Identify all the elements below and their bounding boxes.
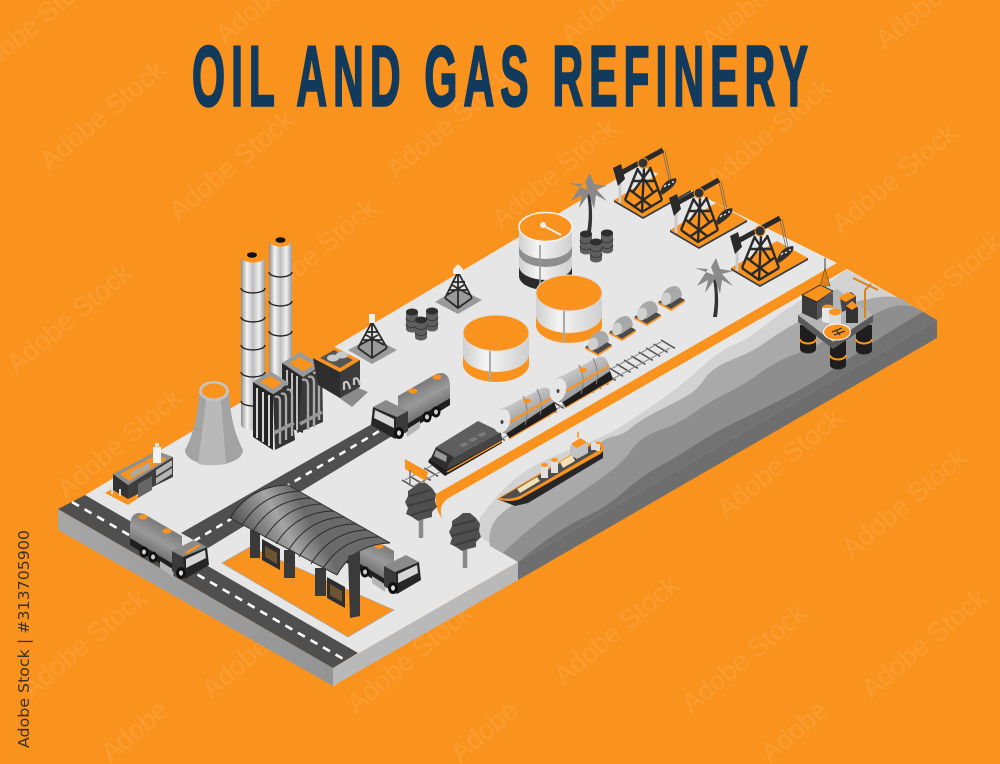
gas station forecourt: [222, 547, 394, 637]
watermark: Adobe Stock: [163, 104, 300, 226]
watermark: Adobe Stock: [486, 112, 623, 234]
chimney stacks: [241, 236, 292, 430]
watermark: Adobe Stock: [566, 222, 703, 344]
stock credit: Adobe Stock | #313705900: [15, 530, 33, 748]
title: OIL AND GAS REFINERY: [192, 30, 808, 124]
cooling tower: [185, 381, 243, 465]
sea with wave layers: [478, 270, 937, 562]
orange strip along the shore: [436, 263, 847, 518]
side road: [181, 424, 392, 548]
storage tank middle: [536, 275, 602, 343]
storage tank tall: [519, 212, 572, 290]
main road: [58, 495, 358, 668]
watermark: Adobe Stock: [856, 582, 993, 704]
palm tree 1: [569, 173, 607, 232]
watermark: Adobe Stock: [16, 582, 153, 704]
watermark: Adobe Stock: [34, 54, 171, 176]
cylinder skids: [585, 286, 685, 356]
watermark: Adobe Stock: [341, 597, 478, 719]
watermark: Adobe Stock: [548, 569, 685, 691]
parked tanker truck: [342, 528, 421, 594]
orange sign: [405, 459, 428, 492]
locomotive: [428, 421, 502, 476]
pipe building rear: [282, 352, 323, 433]
offshore oil rig: [798, 258, 878, 370]
pumpjacks: [613, 150, 808, 287]
watermark: Adobe Stock: [711, 402, 848, 524]
watermark: Adobe Stock: [676, 597, 813, 719]
railway track: [402, 340, 675, 488]
watermark: Adobe Stock: [381, 62, 518, 184]
watermark: Adobe Stock: [51, 382, 188, 504]
palm tree 2: [695, 258, 733, 317]
boiler building: [313, 346, 368, 407]
gas station: [230, 485, 390, 618]
isometric base platform: [58, 165, 937, 686]
pipe building front: [253, 371, 295, 450]
barrels group 1: [406, 308, 438, 340]
watermark: Adobe Stock: [246, 192, 383, 314]
watermark: Adobe Stock: [826, 117, 963, 239]
barrels group 2: [580, 230, 613, 262]
watermark: Adobe Stock: [836, 442, 973, 564]
storage tank front: [463, 315, 529, 382]
watermark: Adobe Stock: [196, 582, 333, 704]
tanker truck on main road: [130, 513, 209, 579]
tanker ship: [497, 432, 604, 506]
tank wagons: [491, 357, 613, 439]
watermark: Adobe Stock: [701, 72, 838, 194]
watermark: Adobe Stock: [311, 302, 448, 424]
lattice tower B: [435, 264, 482, 314]
trees: [405, 483, 481, 568]
tanker truck on road: [371, 373, 450, 439]
lattice tower A: [348, 314, 397, 364]
small processing unit: [105, 443, 173, 505]
watermark: Adobe Stock: [1, 257, 138, 379]
